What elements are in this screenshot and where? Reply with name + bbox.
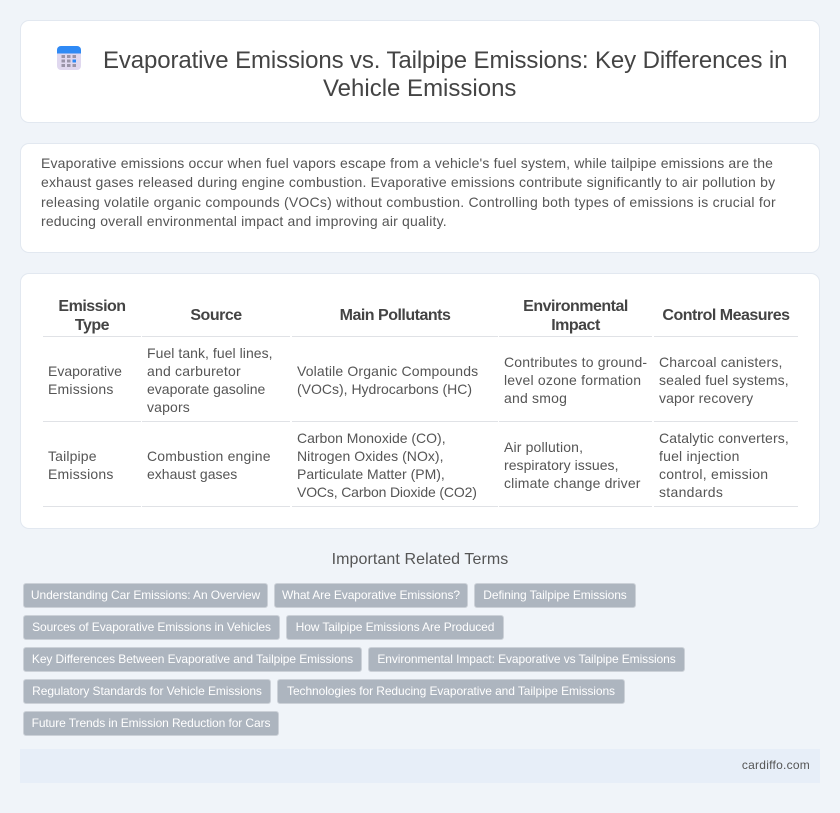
related terms tags: Understanding Car Emissions: An Overview xyxy=(31,588,260,602)
row: tailpipe emissions: Carbon Monoxide (CO), xyxy=(297,430,446,446)
row: evaporative emissions: and smog xyxy=(504,390,567,406)
title: Vehicle Emissions xyxy=(323,75,516,102)
row: evaporative emissions: Contributes to ground- xyxy=(504,354,647,370)
row: evaporative emissions xyxy=(48,345,789,415)
row: tailpipe emissions: Nitrogen Oxides (NOx), xyxy=(297,448,444,464)
related terms tags: Future Trends in Emission Reduction for Cars xyxy=(32,716,270,730)
intro text card xyxy=(20,143,820,253)
table header xyxy=(58,298,790,334)
row: tailpipe emissions: respiratory issues, xyxy=(504,457,619,473)
row: evaporative emissions: and carburetor xyxy=(147,363,241,379)
row: tailpipe emissions: Emissions xyxy=(48,466,114,482)
row: tailpipe emissions: standards xyxy=(659,484,723,500)
row: tailpipe emissions: Catalytic converters, xyxy=(659,430,789,446)
title: Evaporative Emissions vs. Tailpipe Emissions: Key Differences in xyxy=(103,47,787,74)
row: tailpipe emissions: Air pollution, xyxy=(504,439,583,455)
row: evaporative emissions: Evaporative xyxy=(48,363,122,379)
row: evaporative emissions: Charcoal canisters, xyxy=(659,354,783,370)
table header: Type xyxy=(75,317,109,334)
row: evaporative emissions: Volatile Organic Compounds xyxy=(297,363,478,379)
row: evaporative emissions: Fuel tank, fuel lines, xyxy=(147,345,273,361)
row: tailpipe emissions: VOCs, Carbon Dioxide (CO2) xyxy=(297,484,477,500)
related terms tags xyxy=(23,583,685,736)
intro paragraph: exhaust gases released during engine combustion. Evaporative emissions contribute significantly to air pollution by xyxy=(41,174,775,190)
table header: Environmental xyxy=(523,298,628,315)
row: evaporative emissions: Emissions xyxy=(48,381,114,397)
related terms tags: Technologies for Reducing Evaporative and Tailpipe Emissions xyxy=(287,684,615,698)
intro paragraph: releasing volatile organic compounds (VOCs) without combustion. Controlling both types of emissions is crucial for xyxy=(41,194,776,210)
row: tailpipe emissions: Particulate Matter (PM), xyxy=(297,466,445,482)
comparison table card xyxy=(20,273,820,529)
footer credit: cardiffo.com xyxy=(742,758,810,772)
row: evaporative emissions: (VOCs), Hydrocarbons (HC) xyxy=(297,381,472,397)
row: evaporative emissions: vapor recovery xyxy=(659,390,753,406)
table header: Source xyxy=(190,307,242,324)
title xyxy=(103,47,787,102)
related terms heading: Important Related Terms xyxy=(332,551,508,568)
footer bar xyxy=(20,749,820,783)
intro paragraph: Evaporative emissions occur when fuel vapors escape from a vehicle's fuel system, while tailpipe emissions are the xyxy=(41,155,773,171)
row: tailpipe emissions: Tailpipe xyxy=(48,448,97,464)
row: tailpipe emissions: exhaust gases xyxy=(147,466,237,482)
related terms tags: Key Differences Between Evaporative and Tailpipe Emissions xyxy=(32,652,353,666)
row: tailpipe emissions: climate change driver xyxy=(504,475,641,491)
related terms tags: Sources of Evaporative Emissions in Vehicles xyxy=(32,620,271,634)
row: evaporative emissions: level ozone formation xyxy=(504,372,641,388)
icon: calendar xyxy=(57,46,81,70)
row: evaporative emissions: sealed fuel systems, xyxy=(659,372,789,388)
row: tailpipe emissions: fuel injection xyxy=(659,448,740,464)
row: tailpipe emissions: Combustion engine xyxy=(147,448,271,464)
related terms tags: Environmental Impact: Evaporative vs Tailpipe Emissions xyxy=(377,652,676,666)
table header: Control Measures xyxy=(662,307,790,324)
row: tailpipe emissions xyxy=(48,430,789,500)
table header: Main Pollutants xyxy=(340,307,450,324)
related terms tags: Defining Tailpipe Emissions xyxy=(483,588,627,602)
related terms tags: Regulatory Standards for Vehicle Emissions xyxy=(32,684,262,698)
related terms tags: How Tailpipe Emissions Are Produced xyxy=(296,620,494,634)
row: evaporative emissions: evaporate gasoline xyxy=(147,381,265,397)
row: tailpipe emissions: control, emission xyxy=(659,466,768,482)
header card xyxy=(20,20,820,123)
table header: Impact xyxy=(551,317,600,334)
table header: Emission xyxy=(58,298,126,315)
intro paragraph xyxy=(41,155,776,229)
related terms tags: What Are Evaporative Emissions? xyxy=(282,588,460,602)
intro paragraph: reducing overall environmental impact and improving air quality. xyxy=(41,213,447,229)
row: evaporative emissions: vapors xyxy=(147,399,190,415)
